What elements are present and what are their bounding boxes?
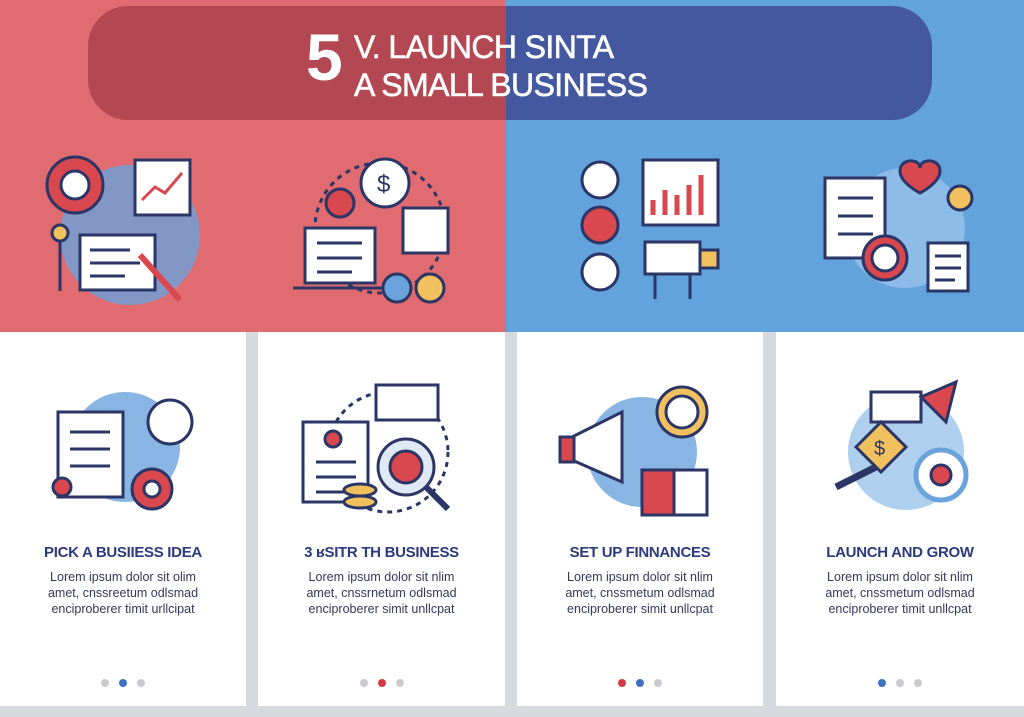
title text: V. LAUNCH SINTA <box>354 29 614 65</box>
card 3: amet, cnssmetum odlsmad <box>565 586 715 600</box>
card 3: enciproberer simit unllcpat <box>567 602 713 616</box>
card text: amet, cnssreetum odlsmad <box>48 586 198 600</box>
card text: enciproberer timit urllcipat <box>51 602 195 616</box>
card 2: 3 ʁSITR TH BUSINESS <box>304 544 459 561</box>
icon: growth and coin: $ <box>874 438 885 460</box>
icon: megaphone and briefcase <box>558 386 708 516</box>
card 1 <box>0 332 246 706</box>
icon: calendar and gears <box>52 392 194 510</box>
title text: A SMALL BUSINESS <box>354 67 647 103</box>
icon: documents and magnifier <box>302 384 450 514</box>
card 4: enciproberer timit unllcpat <box>828 602 972 616</box>
card title: PICK A BUSIIESS IDEA <box>44 544 202 561</box>
card 2 <box>258 332 505 706</box>
background: blue half <box>506 0 1024 332</box>
card 3: SET UP FINNANCES <box>570 544 710 561</box>
card 4: Lorem ipsum dolor sit nlim <box>827 570 973 584</box>
background: red half <box>0 0 506 332</box>
card text <box>48 570 198 616</box>
icon: top 1 idea planning <box>46 156 200 305</box>
card 2: Lorem ipsum dolor sit nlim <box>309 570 454 584</box>
card 2: enciproberer simit unllcpat <box>309 602 454 616</box>
card 4: LAUNCH AND GROW <box>826 544 974 561</box>
icon: growth and coin <box>834 379 968 510</box>
title number: 5 <box>306 20 343 94</box>
card 4 <box>776 332 1024 706</box>
title banner <box>88 6 932 120</box>
icon: top 2 laptop finances: $ <box>377 171 390 198</box>
pagination dots <box>101 679 145 687</box>
card 3: Lorem ipsum dolor sit nlim <box>567 570 713 584</box>
icon: top 3 chart presentation <box>580 158 720 299</box>
title text <box>354 29 647 103</box>
card 3 <box>517 332 763 706</box>
icon: top 4 checklist marketing <box>824 159 974 292</box>
card text: Lorem ipsum dolor sit olim <box>50 570 196 584</box>
icon: top 2 laptop finances <box>293 158 450 304</box>
card 2: amet, cnssrnetum odlsmad <box>306 586 457 600</box>
card 4: amet, cnssmetum odlsmad <box>825 586 975 600</box>
